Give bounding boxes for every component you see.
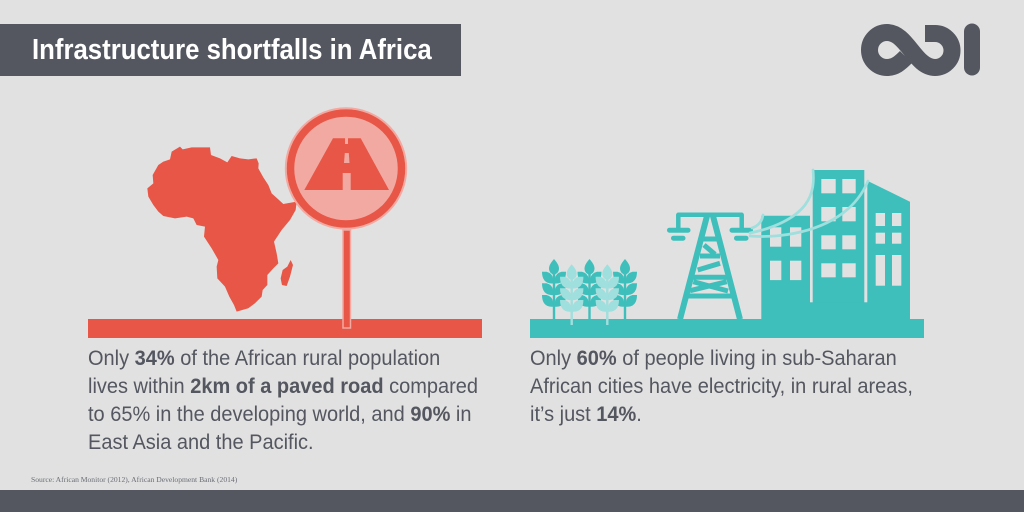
text block: electricity: Only 60% of people living in sub-Saharan: [530, 347, 897, 370]
map of Madagascar: [281, 260, 293, 286]
building centre: [813, 170, 864, 303]
sign post: [343, 230, 350, 328]
title banner: [0, 24, 461, 76]
road bar: [88, 319, 482, 338]
text block: roads: East Asia and the Pacific.: [88, 431, 314, 454]
text block: electricity: [530, 347, 913, 426]
text block: electricity: it’s just 14%.: [530, 403, 642, 426]
icon: buildings: [761, 170, 910, 319]
text block: roads: Only 34% of the African rural population: [88, 347, 440, 370]
icon: crops: [542, 259, 637, 325]
power lines: [750, 170, 868, 236]
map of Africa: [147, 147, 297, 312]
footer bar: [0, 490, 1024, 512]
title: Infrastructure shortfalls in Africa: [32, 34, 432, 66]
road sign: [286, 108, 406, 328]
sign disc: [286, 108, 406, 229]
text block: electricity: African cities have electricity, in rural areas,: [530, 375, 913, 398]
logo: ODI: [870, 24, 980, 76]
building right: [867, 181, 910, 319]
source note: Source: African Monitor (2012), African Development Bank (2014): [31, 475, 237, 484]
icon: pylon: [670, 215, 750, 319]
text block: roads: [88, 347, 478, 454]
icon: road: [304, 138, 389, 190]
text block: roads: to 65% in the developing world, and 90% in: [88, 403, 471, 426]
text block: roads: lives within 2km of a paved road compared: [88, 375, 478, 398]
ground bar: [530, 319, 924, 338]
building left: [761, 216, 810, 319]
building windows: [770, 179, 901, 286]
